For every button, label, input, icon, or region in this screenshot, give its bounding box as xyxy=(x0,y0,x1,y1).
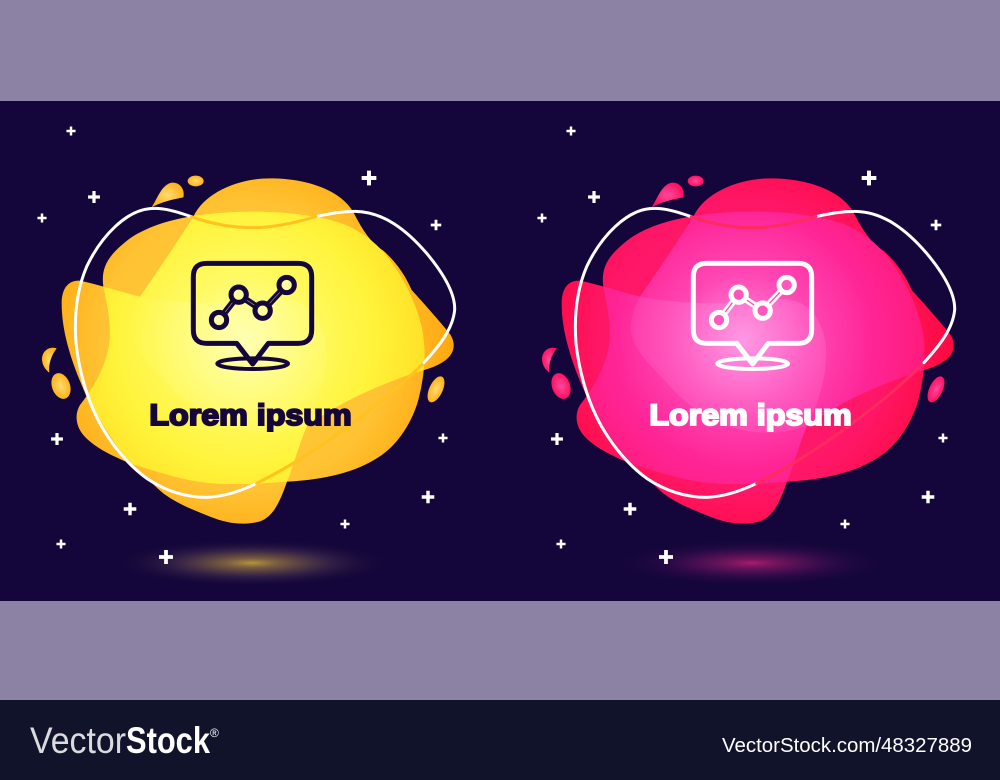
label: Lorem ipsum xyxy=(149,399,352,432)
layered blobs xyxy=(62,178,454,524)
footer bar xyxy=(0,700,1000,780)
image id: VectorStock.com/48327889 xyxy=(722,735,972,757)
top band xyxy=(0,0,1000,101)
icon: map pin chart bubble xyxy=(693,263,812,369)
floor glow xyxy=(112,539,392,587)
label: Lorem ipsum xyxy=(649,399,852,432)
dark panel background xyxy=(0,101,1000,601)
icon: map pin chart bubble xyxy=(193,263,312,369)
floor glow xyxy=(612,539,892,587)
droplets xyxy=(42,176,448,405)
droplets xyxy=(542,176,948,405)
sparkle stars xyxy=(37,126,448,564)
layered blobs xyxy=(562,178,954,524)
registered mark: ® xyxy=(210,726,219,740)
sparkle stars xyxy=(537,126,948,564)
lower band xyxy=(0,601,1000,700)
outline ring xyxy=(575,208,955,497)
brand logo: Vector: Vector xyxy=(30,720,126,761)
panel: yellow variant xyxy=(37,126,455,587)
yellow blob artwork xyxy=(42,176,455,524)
brand logo: Stock: Stock xyxy=(126,720,210,761)
outline ring xyxy=(75,208,455,497)
pink blob artwork xyxy=(542,176,955,524)
panel: pink variant xyxy=(537,126,955,587)
